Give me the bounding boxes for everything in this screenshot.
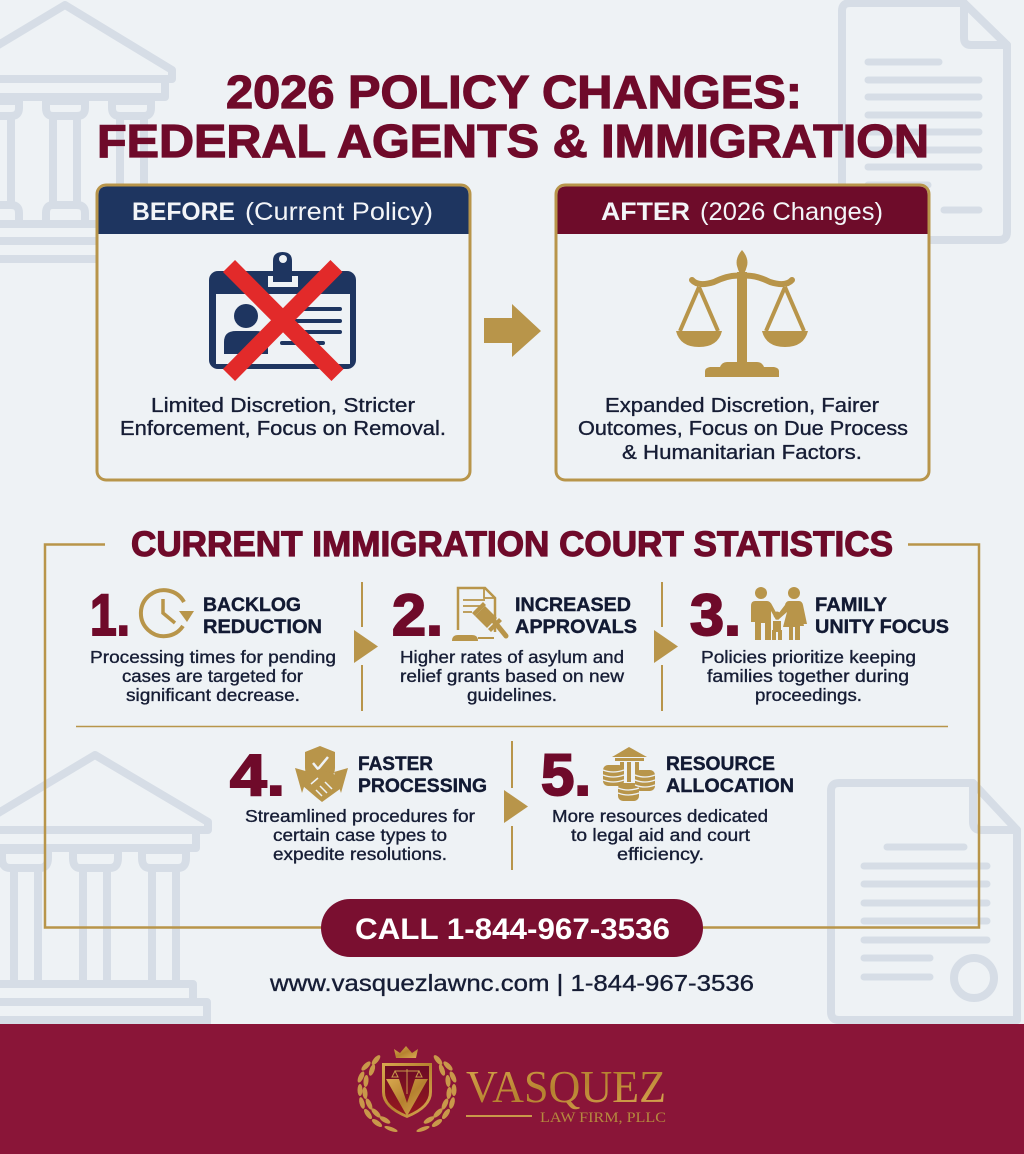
before description: Limited Discretion, Stricter — [151, 395, 415, 417]
stat 4: faster processing: PROCESSING — [358, 775, 487, 797]
stat 3: family unity focus: FAMILY — [815, 594, 887, 616]
panel: after — [556, 185, 929, 480]
after description — [578, 395, 908, 464]
stat 2: increased approvals: INCREASED — [515, 594, 631, 616]
stat 1: backlog reduction: REDUCTION — [203, 616, 322, 638]
after description: Outcomes, Focus on Due Process — [578, 418, 908, 440]
stat 1: backlog reduction: cases are targeted for — [122, 666, 303, 686]
stat 5: resource allocation: efficiency. — [617, 844, 704, 864]
logo: wordmark: VASQUEZ — [466, 1061, 666, 1112]
title — [97, 66, 929, 167]
arrow: stat 1 to 2 — [354, 582, 378, 711]
left laurel — [356, 1054, 398, 1133]
logo: wordmark: LAW FIRM, PLLC — [540, 1110, 666, 1126]
title: FEDERAL AGENTS & IMMIGRATION — [97, 115, 929, 167]
right laurel — [416, 1054, 458, 1133]
stat 1: backlog reduction: BACKLOG — [203, 594, 301, 616]
before description: Enforcement, Focus on Removal. — [120, 418, 446, 440]
stat 2: increased approvals — [392, 583, 637, 705]
arrow: before to after — [484, 304, 541, 357]
stat 5: resource allocation — [541, 743, 794, 864]
after header — [558, 186, 928, 234]
call button — [321, 899, 703, 957]
stat 2: increased approvals: APPROVALS — [515, 616, 637, 638]
icon: crossed-out ID badge — [209, 252, 356, 375]
stat 1: backlog reduction: significant decrease. — [126, 685, 300, 705]
title: 2026 POLICY CHANGES: — [226, 66, 802, 118]
stat 5: resource allocation: RESOURCE — [666, 753, 775, 775]
statistics heading: CURRENT IMMIGRATION COURT STATISTICS — [131, 525, 893, 564]
stat 2: increased approvals: guidelines. — [467, 685, 557, 705]
call button: CALL 1-844-967-3536 — [355, 913, 670, 946]
icon: shield and handshake — [295, 746, 348, 802]
before header: (Current Policy) — [245, 198, 433, 226]
background: courthouse bottom left — [0, 755, 208, 1024]
contact line: www.vasquezlawnc.com | 1-844-967-3536 — [269, 970, 754, 996]
footer band — [0, 1024, 1024, 1154]
icon: bank and coins — [603, 747, 655, 801]
after header: (2026 Changes) — [700, 198, 883, 226]
arrow: stat 4 to 5 — [504, 741, 528, 870]
stat 3: family unity focus: proceedings. — [755, 685, 862, 705]
stat 2: increased approvals: 2. — [392, 583, 443, 648]
stat 1: backlog reduction — [90, 583, 336, 705]
icon: document and gavel — [452, 588, 506, 641]
icon: family — [751, 587, 807, 640]
stat 5: resource allocation: More resources dedicated — [552, 806, 768, 826]
after description: & Humanitarian Factors. — [622, 442, 862, 464]
stat 2: increased approvals: Higher rates of asylum and — [400, 647, 624, 667]
stat 3: family unity focus: UNITY FOCUS — [815, 616, 949, 638]
stat 4: faster processing: 4. — [230, 743, 285, 808]
stat 5: resource allocation: ALLOCATION — [666, 775, 794, 797]
stat 5: resource allocation: to legal aid and court — [571, 825, 750, 845]
panel: before — [97, 185, 470, 480]
stat 1: backlog reduction: Processing times for pending — [90, 647, 336, 667]
background: document bottom right — [831, 783, 1017, 1020]
stat 4: faster processing: Streamlined procedures for — [245, 806, 475, 826]
background: document top right — [842, 3, 1007, 240]
icon: clock — [141, 590, 194, 636]
background: courthouse top left — [0, 5, 172, 259]
stat 5: resource allocation: 5. — [541, 743, 591, 808]
stat 1: backlog reduction: 1. — [90, 583, 130, 648]
after header: AFTER — [601, 198, 690, 226]
stat 4: faster processing — [230, 743, 487, 864]
stat 3: family unity focus: Policies prioritize keeping — [701, 647, 916, 667]
before header — [98, 186, 468, 234]
crown — [394, 1046, 418, 1058]
stat 3: family unity focus — [690, 583, 949, 705]
logo: crest — [356, 1046, 458, 1133]
before header: BEFORE — [132, 198, 235, 226]
panel: statistics frame — [45, 544, 979, 928]
stat 4: faster processing: expedite resolutions. — [273, 844, 447, 864]
arrow: stat 2 to 3 — [654, 582, 678, 711]
before description — [120, 395, 446, 440]
stat 3: family unity focus: families together during — [707, 666, 909, 686]
icon: scales of justice — [676, 250, 808, 377]
stat 2: increased approvals: relief grants based on new — [400, 666, 624, 686]
stat 4: faster processing: certain case types to — [273, 825, 447, 845]
stat 4: faster processing: FASTER — [358, 753, 433, 775]
stat 3: family unity focus: 3. — [690, 583, 741, 648]
after description: Expanded Discretion, Fairer — [605, 395, 879, 417]
